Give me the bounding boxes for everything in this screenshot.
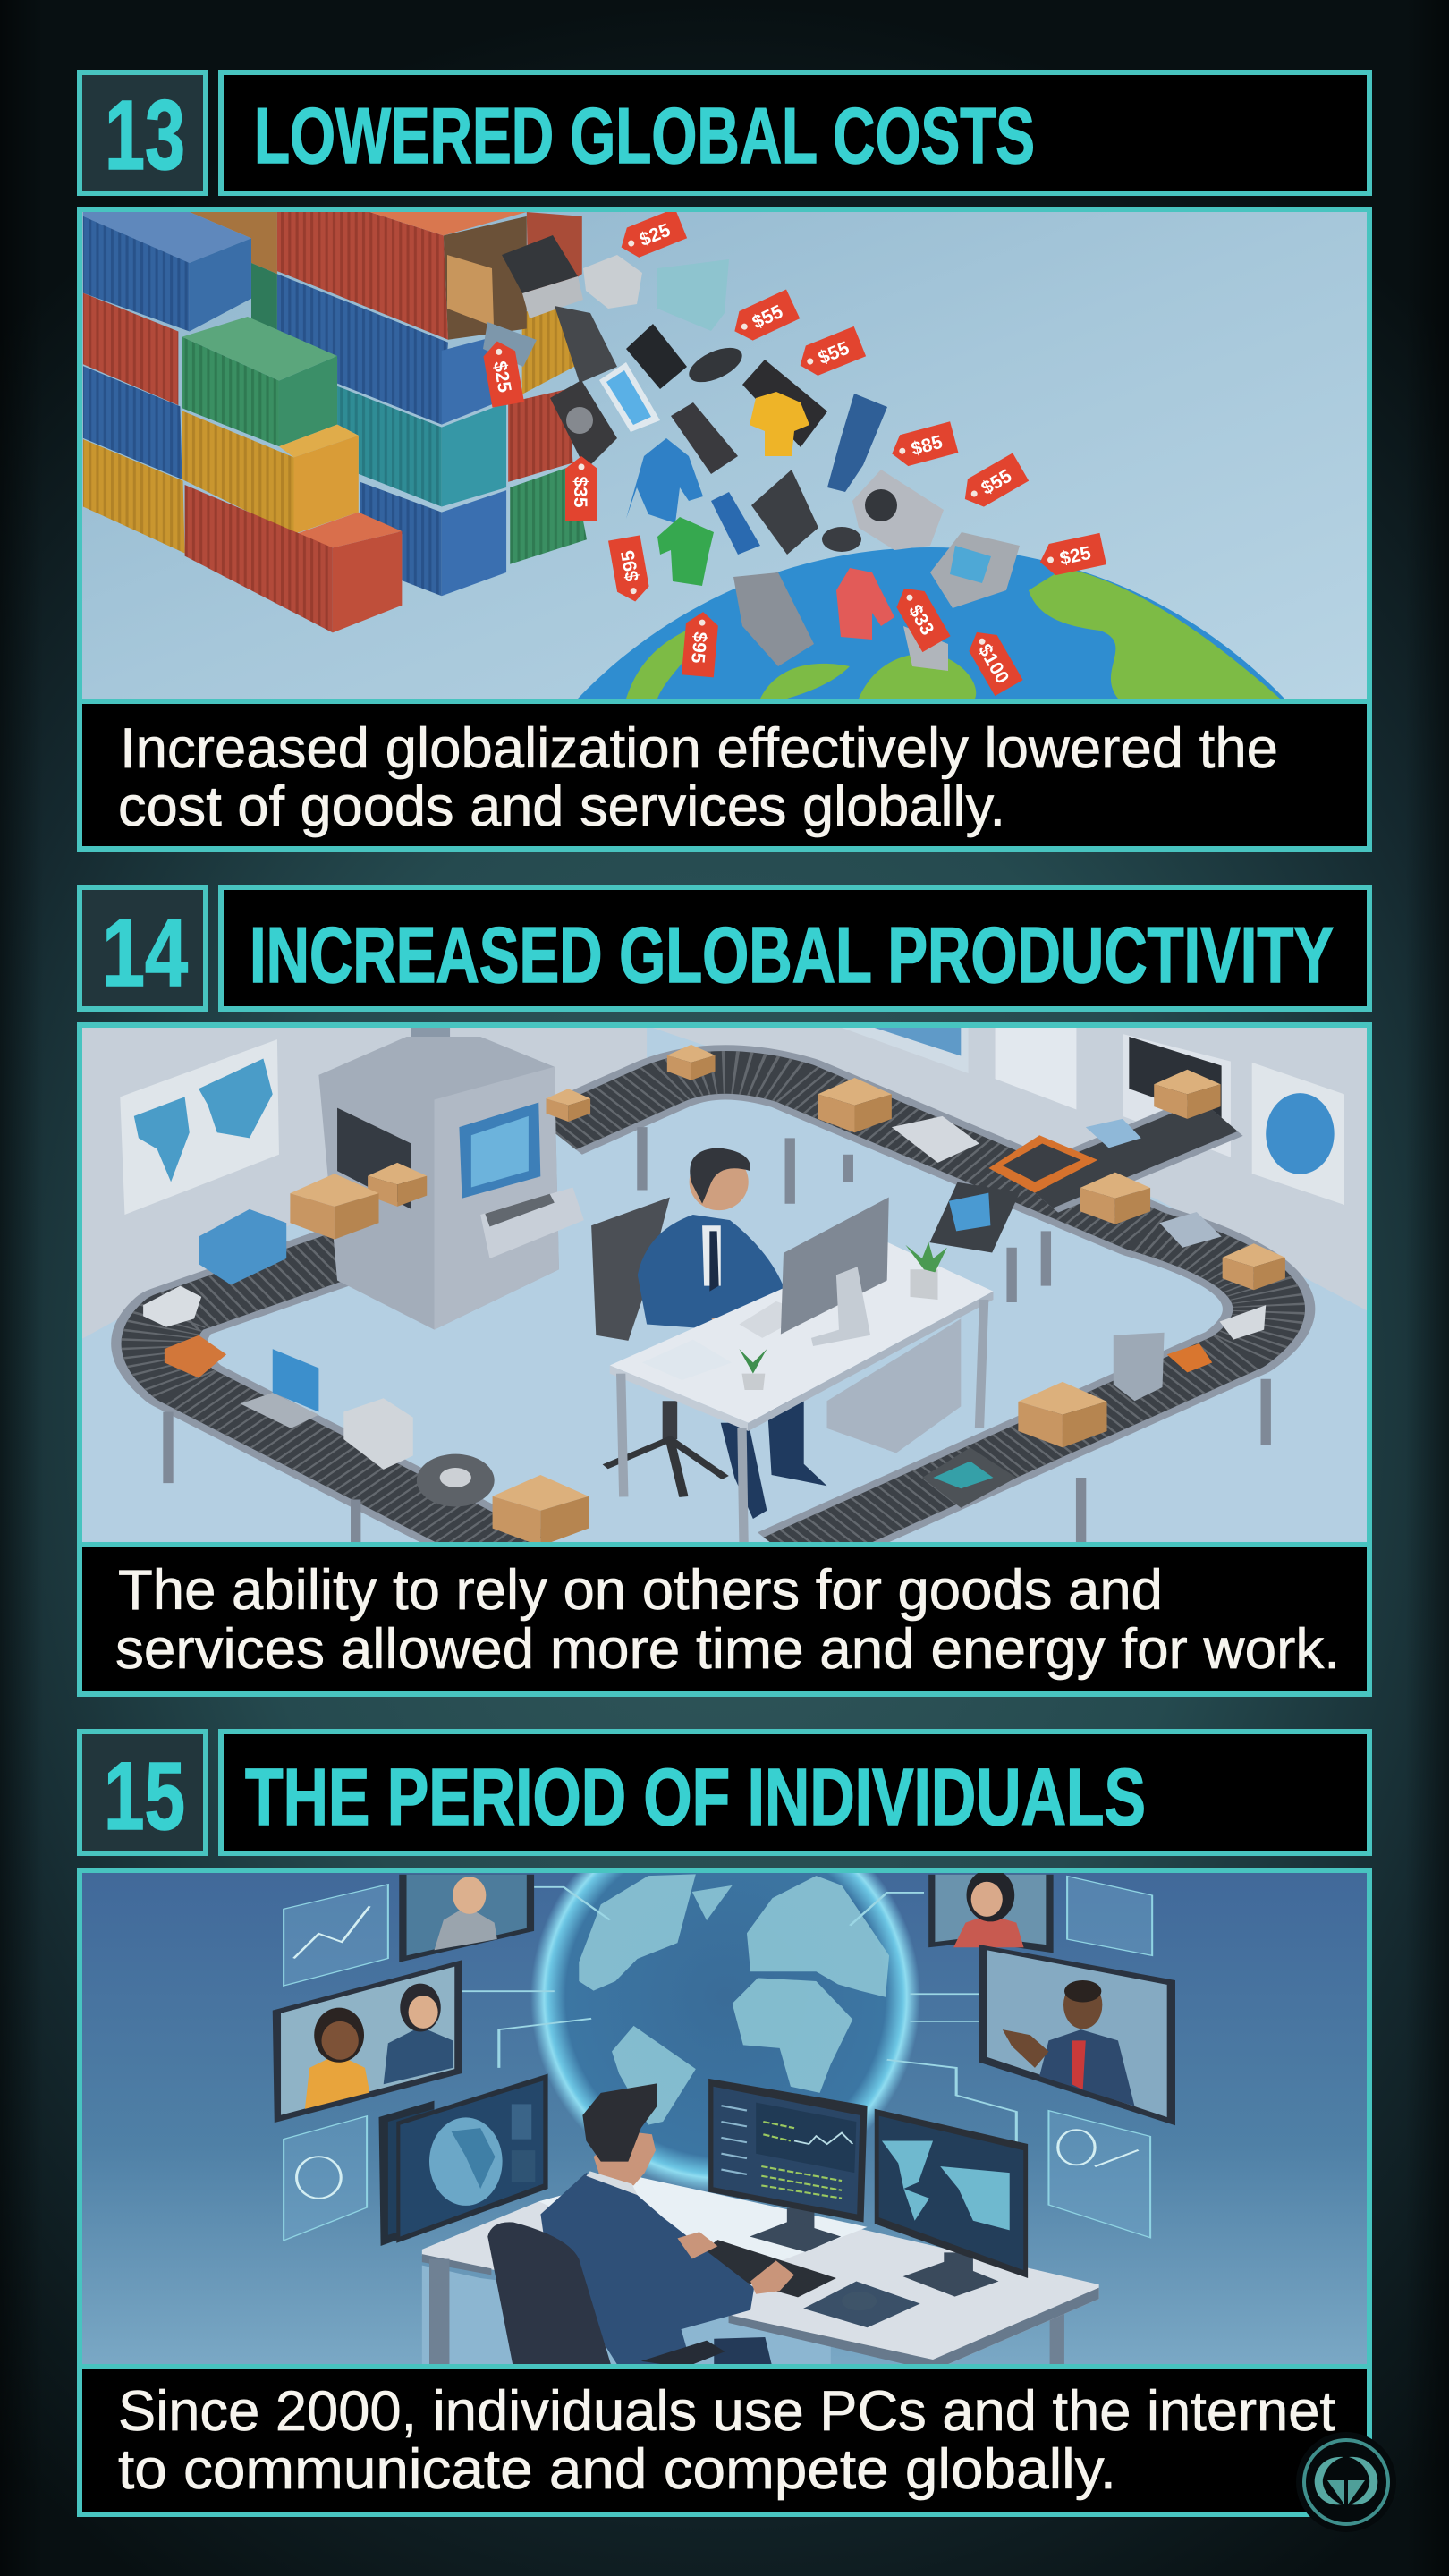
caption panel xyxy=(80,2367,1369,2514)
illustration: individual at desk with global screens xyxy=(82,1873,1367,2364)
desk with computer xyxy=(610,1197,993,1544)
floor under desk xyxy=(422,2266,831,2368)
number badge 13 xyxy=(80,72,206,193)
globe xyxy=(578,547,1284,699)
conveyor supports xyxy=(168,1127,1266,1549)
price tags: $95 xyxy=(617,548,643,583)
caption panel: Increased globalization effectively lowered the xyxy=(120,717,1278,780)
price tags: $25 xyxy=(1058,543,1093,570)
caption panel: to communicate and compete globally. xyxy=(118,2438,1116,2501)
price tags: $25 xyxy=(637,220,674,250)
price tags: $35 xyxy=(570,476,590,508)
left monitor with globe xyxy=(396,2073,548,2243)
section 15: the period of individuals xyxy=(80,1732,1369,2514)
illustration: containers, goods and globe xyxy=(82,212,1367,699)
caption panel: The ability to rely on others for goods and xyxy=(118,1559,1163,1622)
video call screen: man presenting xyxy=(979,1945,1175,2125)
office chair xyxy=(487,2222,724,2368)
worker xyxy=(638,1148,827,1519)
caption panel xyxy=(80,701,1369,849)
price tags: $55 xyxy=(816,338,852,369)
connector lines xyxy=(462,1887,1016,2145)
logo emblem xyxy=(1296,2432,1396,2532)
section 13: lowered global costs xyxy=(77,70,1372,852)
wall map xyxy=(120,1039,279,1215)
title bar: LOWERED GLOBAL COSTS xyxy=(254,91,1035,180)
chart and document posters xyxy=(836,1026,1231,1157)
desk xyxy=(422,2176,1099,2374)
number badge 15 xyxy=(80,1732,206,1853)
price tags xyxy=(481,208,1106,696)
wall globe poster xyxy=(1252,1063,1344,1205)
title bar xyxy=(221,887,1369,1009)
keyboard and mouse xyxy=(685,2240,920,2327)
number badge 13: 13 xyxy=(105,80,185,191)
video call screen: two people left xyxy=(273,1960,462,2123)
price tags: $55 xyxy=(750,301,786,333)
workstation close-up xyxy=(396,2073,1099,2374)
conveyor belts xyxy=(159,1072,1269,1555)
packages and goods on belts xyxy=(143,1045,1285,1546)
room walls xyxy=(79,1026,1372,1341)
title bar xyxy=(221,72,1369,193)
floating data panels xyxy=(284,1877,1152,2241)
caption panel: services allowed more time and energy for work. xyxy=(115,1618,1340,1681)
number badge 15: 15 xyxy=(104,1741,185,1850)
image frame xyxy=(80,1870,1369,2367)
image frame xyxy=(80,1025,1369,1545)
shipping containers xyxy=(83,212,587,632)
price tags: $95 xyxy=(687,631,710,665)
price tags: $33 xyxy=(904,601,937,639)
video call screen: woman top left xyxy=(399,1875,534,1962)
illustration: worker inside conveyor loop xyxy=(79,1023,1372,1555)
section 14: increased global productivity xyxy=(79,887,1372,1694)
price tags: $25 xyxy=(489,360,515,394)
office chair xyxy=(591,1197,725,1496)
image frame xyxy=(80,209,1369,701)
scattered goods xyxy=(447,235,1020,671)
video call screen: woman top right xyxy=(928,1869,1054,1953)
left workstation side panel xyxy=(379,2101,435,2246)
caption panel: cost of goods and services globally. xyxy=(118,775,1005,838)
center code monitor xyxy=(708,2079,868,2252)
price tags: $55 xyxy=(978,465,1015,499)
right map monitor xyxy=(875,2109,1028,2297)
title bar: THE PERIOD OF INDIVIDUALS xyxy=(245,1753,1146,1843)
caption panel xyxy=(80,1545,1369,1694)
caption panel: Since 2000, individuals use PCs and the internet xyxy=(118,2380,1335,2443)
number badge 14: 14 xyxy=(102,898,188,1006)
scanning machine xyxy=(318,1026,584,1330)
price tags: $85 xyxy=(909,432,945,460)
worker seen from behind xyxy=(540,2083,794,2368)
holographic globe xyxy=(530,1802,920,2192)
price tags: $100 xyxy=(974,640,1013,687)
